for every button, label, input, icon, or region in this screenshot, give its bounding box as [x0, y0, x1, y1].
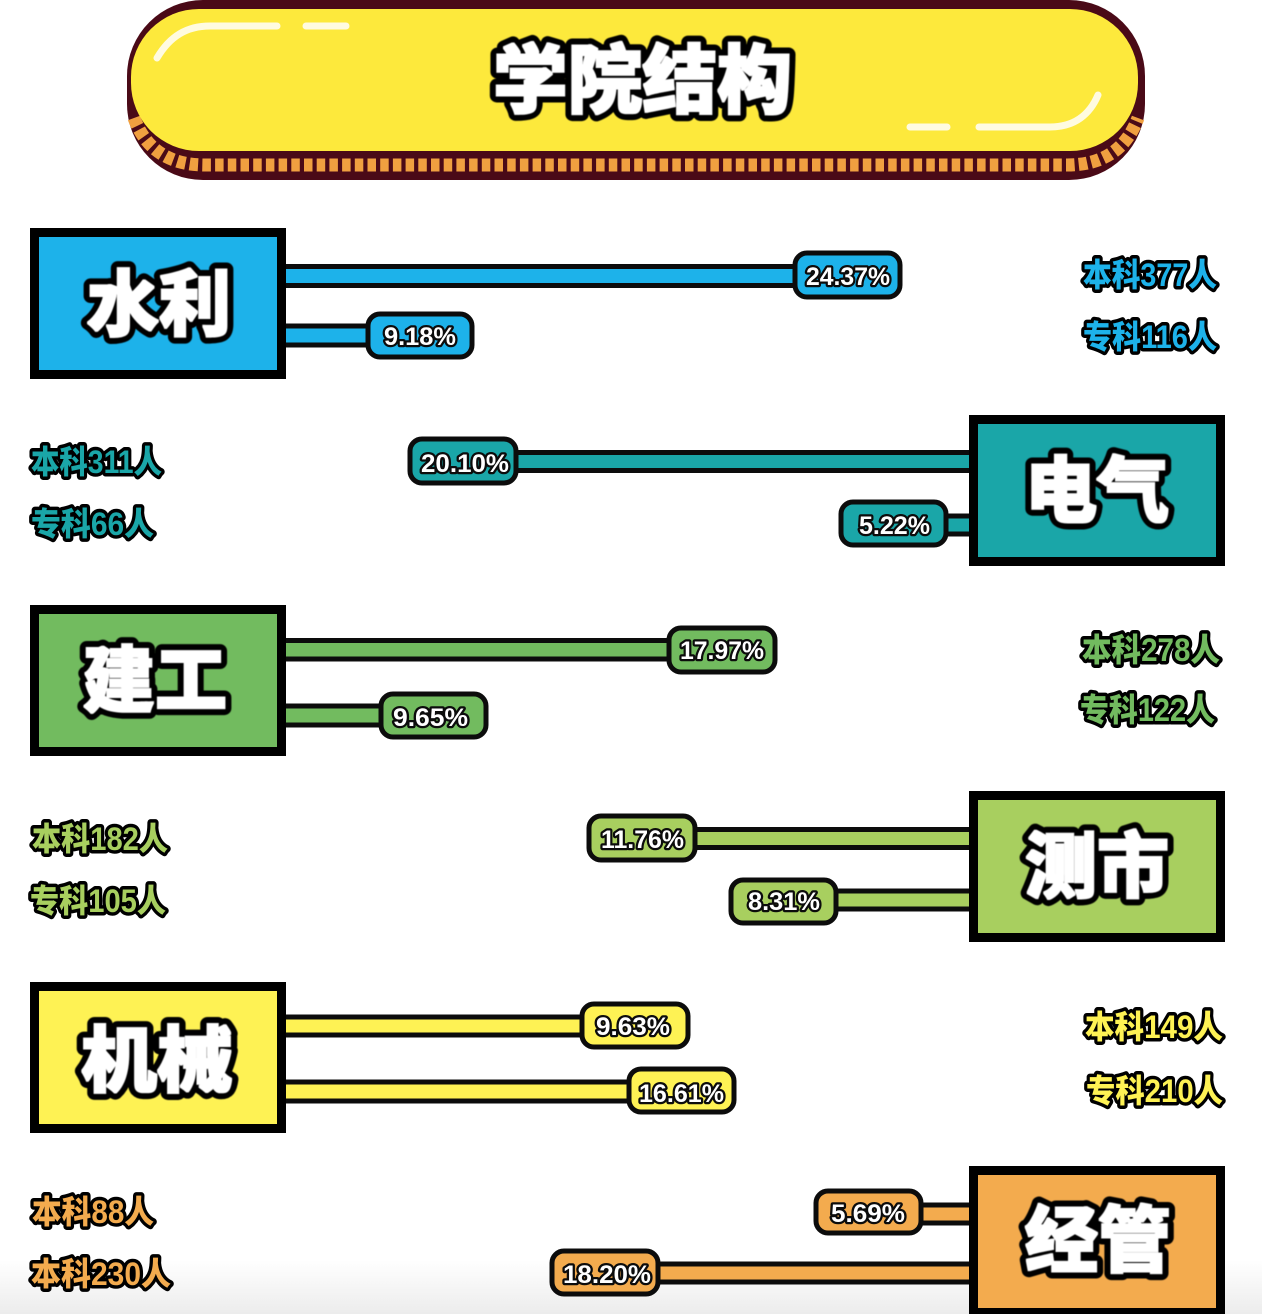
category name: 机械: [81, 1002, 233, 1107]
category box: [974, 796, 1220, 938]
headcount labels: 专科210人: [1086, 1073, 1223, 1109]
value pill 18.20%: [552, 1251, 658, 1294]
category name: 水利: [87, 246, 231, 351]
category name: 经管: [1025, 1182, 1171, 1287]
value pill 20.10%: 20.10%: [421, 450, 509, 478]
headcount labels: 本科377人: [1083, 257, 1217, 293]
value pill 9.18%: 9.18%: [384, 323, 456, 351]
headcount labels: [31, 1194, 171, 1292]
category box: [34, 232, 282, 374]
value pill 9.65%: [381, 694, 486, 737]
headcount labels: 本科88人: [32, 1194, 154, 1230]
bars: [690, 830, 974, 909]
value pill 24.37%: [795, 253, 900, 297]
row: 电气: [31, 420, 1220, 562]
bars: [654, 1205, 974, 1282]
category box: [34, 986, 282, 1128]
value pill 17.97%: [669, 628, 775, 672]
headcount labels: 专科116人: [1083, 319, 1217, 355]
category box: [34, 610, 282, 752]
value pill 8.31%: 8.31%: [748, 888, 820, 916]
bars: [512, 452, 974, 534]
value pill 11.76%: [589, 816, 695, 860]
value pill 16.61%: 16.61%: [639, 1080, 724, 1108]
category name: 建工: [83, 622, 227, 727]
value pill 9.63%: [582, 1004, 688, 1047]
headcount labels: [31, 444, 162, 542]
headcount labels: [1083, 257, 1217, 355]
headcount labels: [30, 821, 168, 919]
headcount labels: 专科122人: [1080, 692, 1215, 728]
headcount labels: [1085, 1009, 1223, 1109]
category name: 测市: [1025, 808, 1169, 913]
row: 水利: [34, 232, 1217, 374]
bars: [280, 266, 800, 345]
headcount labels: 本科182人: [32, 821, 168, 857]
banner highlights: [157, 26, 1098, 127]
row: 测市: [30, 796, 1220, 938]
value pill 11.76%: 11.76%: [601, 826, 684, 854]
value pill 8.31%: [731, 880, 836, 923]
category box: [974, 1170, 1220, 1312]
value pill 16.61%: [629, 1069, 734, 1112]
value pill 5.22%: [841, 502, 946, 545]
bars: [280, 1017, 634, 1101]
value pill 20.10%: [410, 439, 516, 483]
headcount labels: 本科278人: [1082, 632, 1220, 668]
value pill 24.37%: 24.37%: [806, 263, 890, 291]
value pill 5.22%: 5.22%: [859, 512, 930, 540]
value pill 5.69%: [816, 1191, 921, 1233]
value pill 9.65%: 9.65%: [393, 704, 468, 732]
row: 建工: [34, 610, 1220, 752]
value pill 5.69%: 5.69%: [831, 1200, 905, 1228]
value pill 17.97%: 17.97%: [680, 637, 764, 665]
category name: 电气: [1025, 432, 1169, 537]
title text: 学院结构: [493, 20, 792, 129]
headcount labels: [1080, 632, 1220, 728]
bars: [280, 640, 675, 725]
headcount labels: 本科230人: [31, 1256, 171, 1292]
value pill 18.20%: 18.20%: [563, 1261, 651, 1289]
category box: [974, 420, 1220, 562]
headcount labels: 本科149人: [1085, 1009, 1223, 1045]
row: 机械: [34, 986, 1223, 1128]
title banner: [127, 0, 1145, 180]
headcount labels: 本科311人: [31, 444, 162, 480]
row: 经管: [31, 1170, 1220, 1312]
headcount labels: 专科105人: [30, 883, 166, 919]
headcount labels: 专科66人: [31, 506, 154, 542]
value pill 9.63%: 9.63%: [596, 1013, 670, 1041]
value pill 9.18%: [368, 314, 472, 357]
